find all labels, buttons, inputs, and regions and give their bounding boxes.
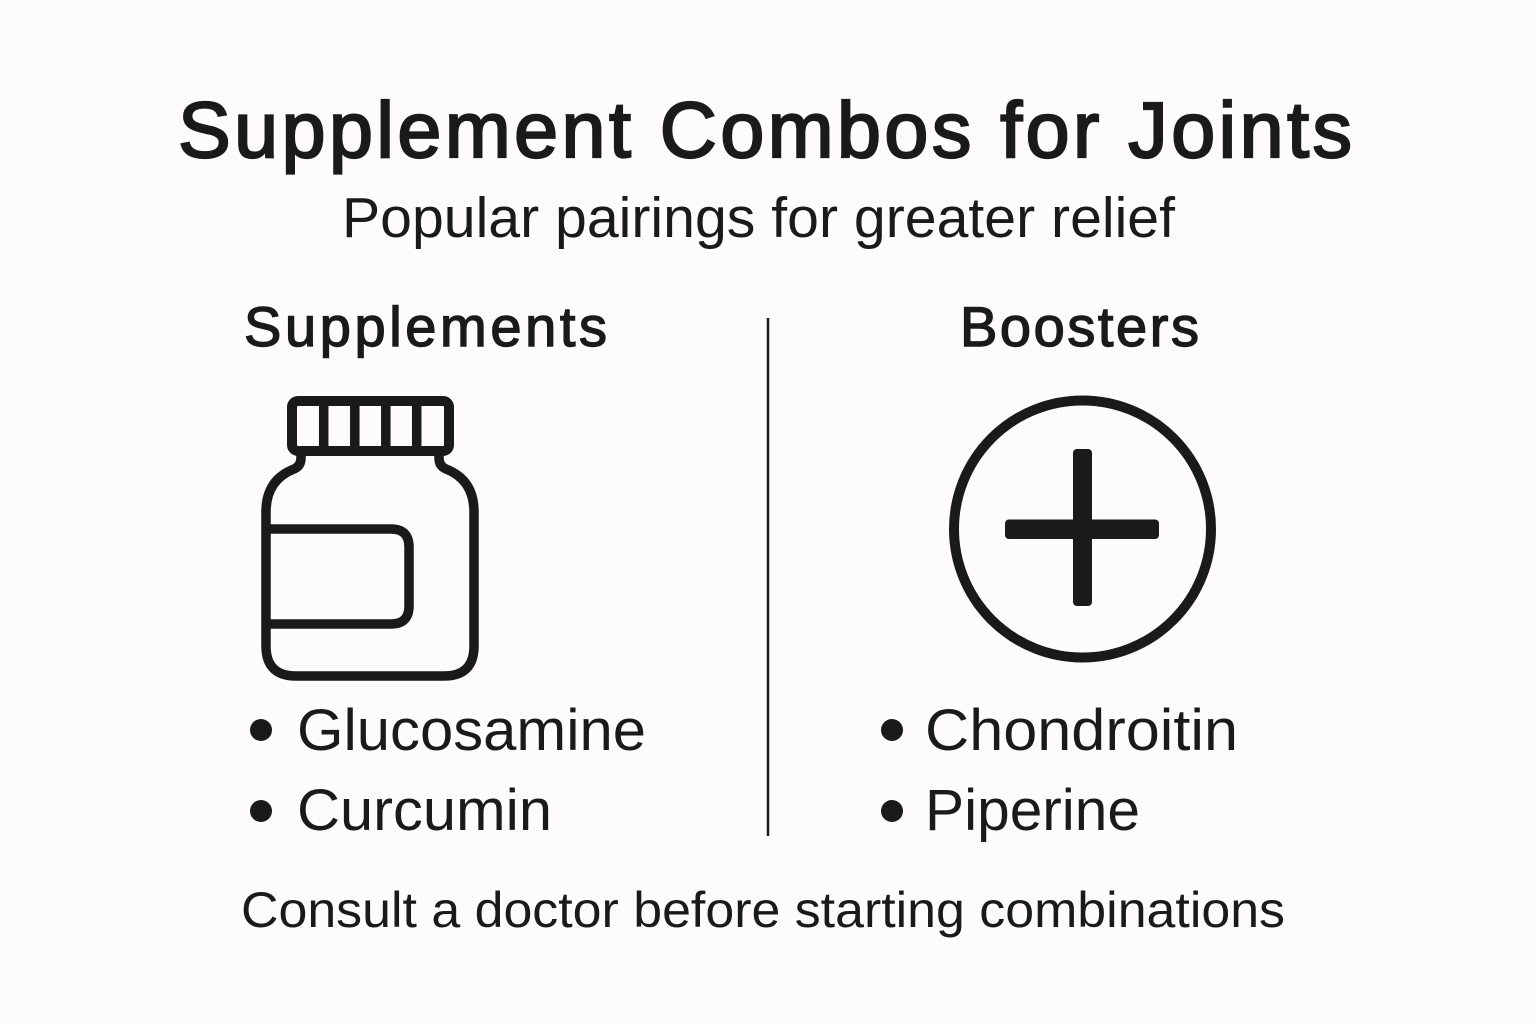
heading: boosters: Boosters xyxy=(960,295,1199,358)
heading: supplements: Supplements xyxy=(244,295,607,358)
panel: boosters xyxy=(881,295,1238,843)
list: boosters: Chondroitin xyxy=(925,698,1238,763)
footer note: Consult a doctor before starting combinations xyxy=(241,882,1285,938)
list: supplements xyxy=(250,698,646,843)
list: supplements: Glucosamine xyxy=(297,698,646,763)
subtitle: Popular pairings for greater relief xyxy=(342,186,1175,250)
list: supplements: Curcumin xyxy=(297,778,552,843)
icon: plus in circle xyxy=(954,400,1211,658)
panel: supplements xyxy=(244,295,646,843)
icon: supplement bottle xyxy=(266,401,474,676)
title: Supplement Combos for Joints xyxy=(178,85,1352,174)
list: boosters xyxy=(881,698,1238,843)
list: boosters: Piperine xyxy=(925,778,1140,843)
